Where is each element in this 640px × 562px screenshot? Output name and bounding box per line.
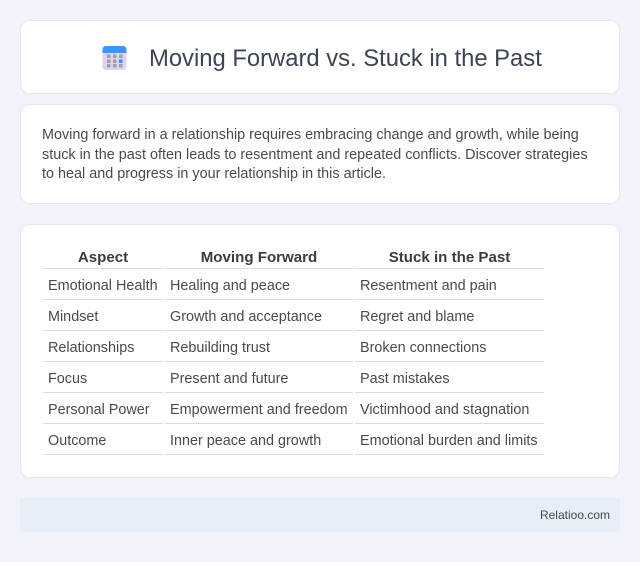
row: Relationships (48, 340, 486, 356)
row: Focus: Present and future (170, 371, 288, 387)
table header (78, 249, 510, 266)
row: Emotional Health (48, 278, 497, 294)
panel: title card (20, 20, 620, 94)
row: Emotional Health: Healing and peace (170, 278, 290, 294)
row: Relationships: Relationships (48, 340, 134, 356)
row: Focus: Focus (48, 371, 87, 387)
row: Personal Power (48, 402, 529, 418)
panel: introduction (20, 104, 620, 204)
row: Outcome: Outcome (48, 433, 106, 449)
row: Outcome: Emotional burden and limits (360, 433, 538, 449)
footer bar (20, 498, 620, 532)
intro text: stuck in the past often leads to resentment and repeated conflicts. Discover strategies (42, 146, 588, 162)
footer credit: Relatioo.com (540, 508, 610, 522)
row: Emotional Health: Resentment and pain (360, 278, 497, 294)
row: Personal Power: Empowerment and freedom (170, 402, 348, 418)
row: Focus (48, 371, 450, 387)
icon: calendar (102, 46, 126, 70)
table header: Moving Forward (201, 249, 317, 266)
panel: comparison table (20, 224, 620, 478)
row: Outcome: Inner peace and growth (170, 433, 321, 449)
table header: Aspect (78, 249, 128, 266)
row: Mindset: Mindset (48, 309, 98, 325)
intro text (42, 127, 588, 182)
row: Emotional Health: Emotional Health (48, 278, 158, 294)
row: Relationships: Rebuilding trust (170, 340, 270, 356)
intro text: to heal and progress in your relationship in this article. (42, 166, 386, 182)
row: Mindset (48, 309, 474, 325)
title: Moving Forward vs. Stuck in the Past (149, 45, 542, 72)
row: Mindset: Regret and blame (360, 309, 474, 325)
row: Personal Power: Victimhood and stagnation (360, 402, 529, 418)
row: Personal Power: Personal Power (48, 402, 150, 418)
table header: Stuck in the Past (389, 249, 510, 266)
row: Relationships: Broken connections (360, 340, 486, 356)
intro text: Moving forward in a relationship requires embracing change and growth, while being (42, 127, 579, 143)
row: Focus: Past mistakes (360, 371, 450, 387)
row: Outcome (48, 433, 538, 449)
row: Mindset: Growth and acceptance (170, 309, 322, 325)
